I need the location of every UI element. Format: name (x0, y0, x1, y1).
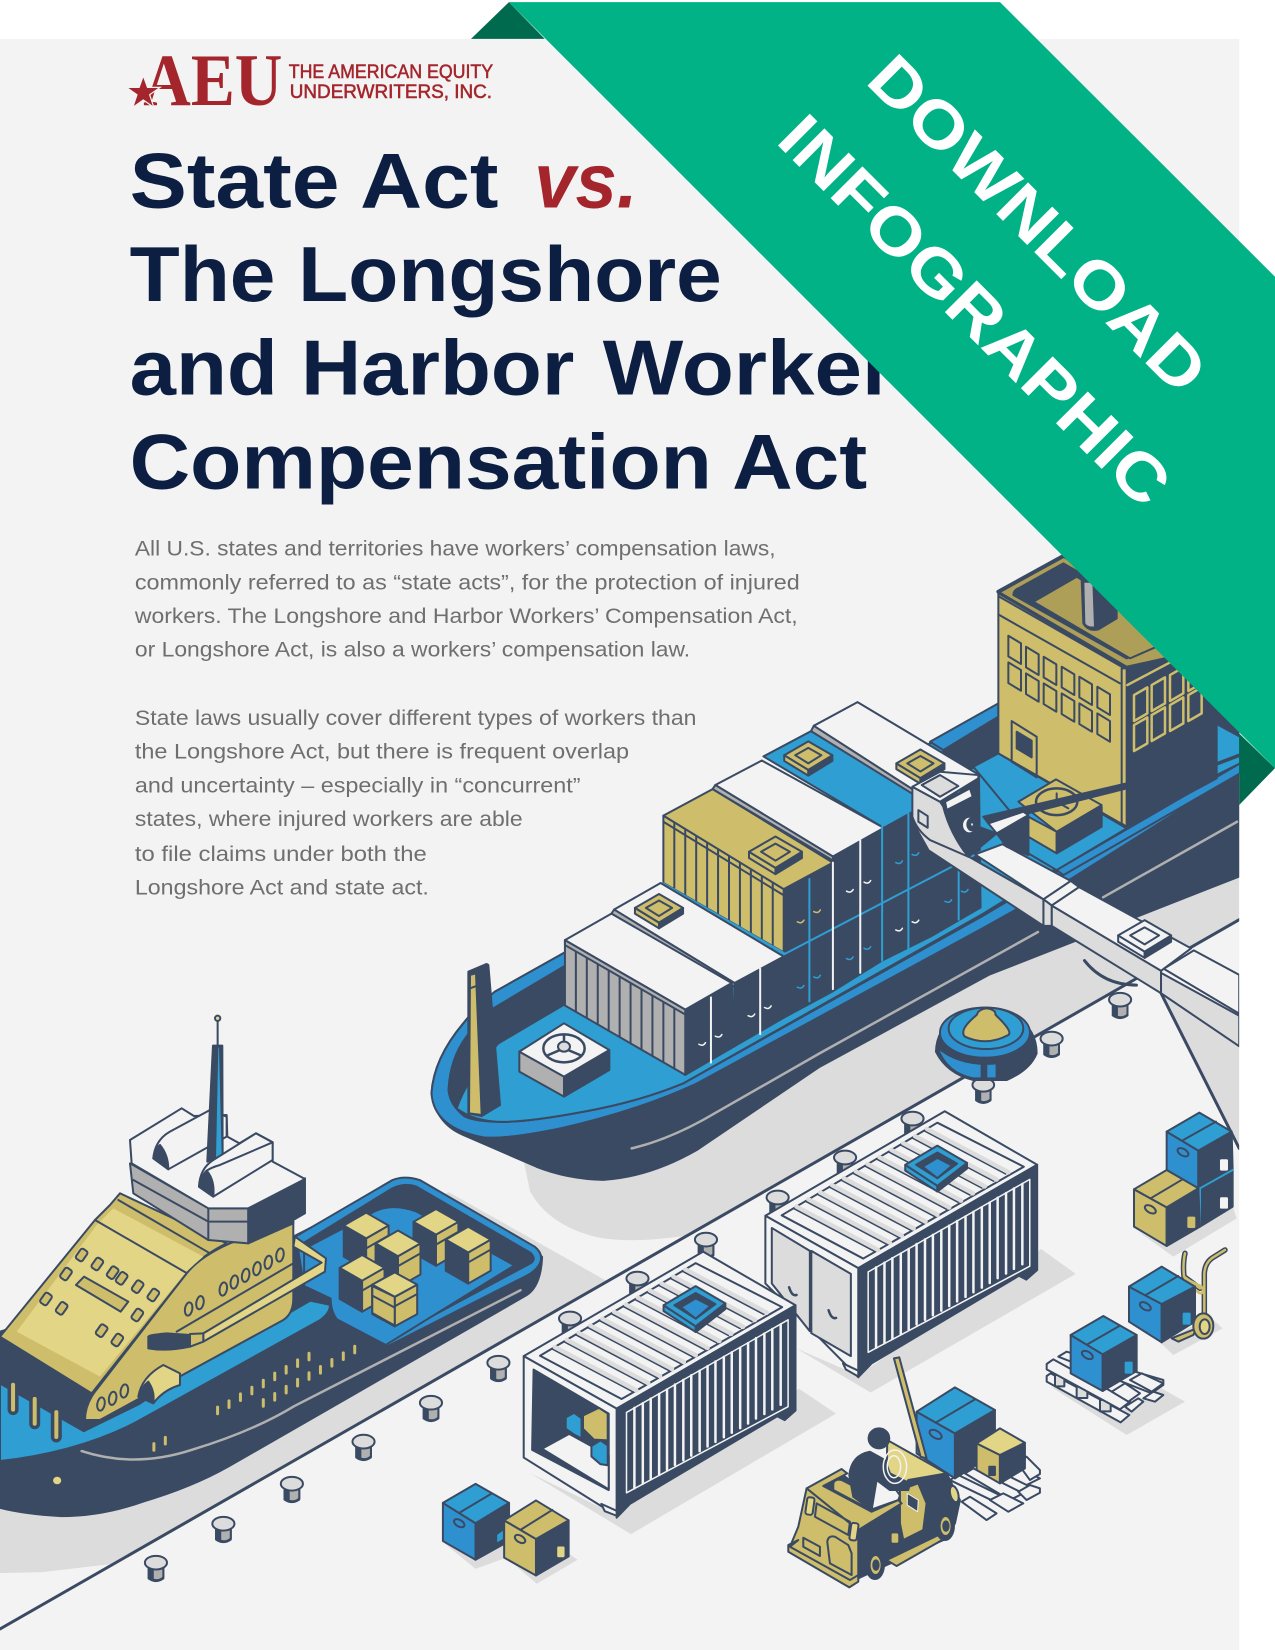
rear white and blue containers (763, 702, 981, 961)
aft deck details (930, 703, 998, 750)
intro paragraph (134, 536, 800, 662)
forklift body (788, 1440, 960, 1587)
winch box (1028, 817, 1057, 853)
right side cargo (1047, 1113, 1237, 1435)
building right face (1128, 659, 1218, 828)
blue box (443, 1484, 509, 1560)
container: open with cargo (524, 1252, 796, 1518)
superstructure front slope (0, 1193, 227, 1393)
title: vs. (534, 136, 638, 224)
ribbon text: infographic: INFOGRAPHIC (765, 100, 1185, 520)
forklift driver (849, 1428, 910, 1510)
box shadows (444, 1539, 578, 1584)
bollards along quay (145, 993, 1131, 1581)
title: State Act (130, 136, 498, 224)
crane underside (1084, 961, 1136, 985)
upper block (130, 1163, 305, 1243)
aft deck inner (304, 1185, 534, 1342)
third white container (713, 761, 884, 991)
intro paragraph: workers. The Longshore and Harbor Workers’ Compensation Act, (134, 603, 798, 628)
container end lines and handles (784, 785, 983, 1001)
cargo shadows (1051, 1207, 1237, 1435)
logo letters AEU: AEU (143, 39, 282, 121)
forklift with cargo (788, 1357, 1040, 1587)
container shadows (530, 1249, 1076, 1534)
title: Compensation Act (130, 417, 867, 505)
hull stripe (82, 1290, 520, 1459)
container stacks on large ship (565, 702, 983, 1075)
small ship superstructure (0, 1016, 326, 1420)
ribbon text: download: DOWNLOAD (854, 40, 1222, 407)
second paragraph: the Longshore Act, but there is frequent overlap (135, 739, 629, 764)
second paragraph: and uncertainty – especially in “concurrent” (135, 772, 581, 797)
front funnel (199, 1133, 273, 1197)
hull stripe (632, 822, 1237, 1148)
container: doors closed (765, 1111, 1037, 1377)
hull (430, 732, 1240, 1181)
deck posts (13, 1385, 56, 1437)
side windows (96, 1248, 285, 1411)
hand truck with blue box (1129, 1250, 1225, 1342)
shipping containers (524, 1111, 1076, 1534)
mast (207, 1016, 223, 1162)
intro paragraph: or Longshore Act, is also a workers’ compensation law. (135, 637, 690, 662)
forklift yellow box (977, 1428, 1025, 1483)
stacked boxes (1134, 1113, 1233, 1246)
logo: AEU (126, 39, 493, 121)
deck rim (431, 703, 1239, 1138)
bow winch (519, 1023, 609, 1097)
second paragraph: states, where injured workers are able (135, 806, 523, 831)
bow mast (468, 964, 500, 1116)
second paragraph (135, 705, 697, 899)
bow winch and mast (468, 964, 609, 1116)
title: The Longshore (130, 230, 722, 318)
second paragraph: to file claims under both the (135, 841, 427, 866)
small cargo ship (0, 1178, 542, 1516)
front windows (39, 1248, 160, 1347)
forklift mast (894, 1357, 927, 1458)
side bump (138, 1365, 180, 1403)
aft deck floor (304, 1207, 514, 1345)
logo company name: THE AMERICAN EQUITY (289, 62, 493, 83)
hull portholes (154, 1346, 355, 1450)
building front face (998, 593, 1127, 827)
water shadows (0, 878, 1240, 1630)
cargo boxes near quay (443, 1484, 578, 1584)
gantry crane (915, 826, 1239, 1148)
pallet with blue box (1047, 1316, 1163, 1422)
large ship hull (431, 663, 1239, 1180)
bridge building and aft deck (930, 556, 1240, 875)
harbor illustration (0, 556, 1240, 1629)
side windows (1134, 657, 1202, 751)
forklift pallet (950, 1457, 1040, 1520)
download ribbon (471, 2, 1275, 805)
fore deck (0, 1301, 330, 1461)
deck cargo cubes (340, 1209, 491, 1326)
title: and Harbor (130, 324, 574, 412)
logo: AEU: UNDERWRITERS, INC. (290, 82, 492, 103)
crane leg (1161, 993, 1239, 1148)
forklift blue box (917, 1387, 995, 1478)
hull (0, 1225, 544, 1518)
rear funnel (153, 1110, 227, 1169)
crane head (912, 772, 1127, 857)
second paragraph: State laws usually cover different types of workers than (135, 705, 697, 730)
beam sides (915, 826, 1043, 926)
aft deck rim (296, 1178, 541, 1346)
roof cap (130, 1108, 305, 1208)
ribbon band (509, 2, 1275, 768)
logo star (126, 76, 160, 107)
title: Workers’ (603, 324, 966, 412)
deck floor (458, 768, 1138, 1123)
second paragraph: Longshore Act and state act. (135, 874, 429, 899)
ribbon fold right (1239, 733, 1275, 805)
beam hatch (1118, 920, 1171, 958)
intro paragraph: commonly referred to as “state acts”, for the protection of injured (135, 569, 800, 594)
title (130, 136, 966, 505)
forklift wheels (866, 1485, 960, 1579)
mooring buoy (936, 1008, 1037, 1103)
front windows (1008, 636, 1110, 742)
building door (1012, 721, 1037, 777)
second front white container (611, 883, 784, 1046)
roof (1000, 558, 1164, 666)
balcony (148, 1237, 326, 1350)
beam tops (975, 844, 1071, 899)
yellow box (504, 1500, 569, 1575)
gray ribbed container (565, 914, 734, 1075)
superstructure side (85, 1222, 293, 1420)
ribbon fold left (471, 2, 545, 39)
intro paragraph: All U.S. states and territories have workers’ compensation laws, (135, 536, 776, 561)
yellow container (663, 789, 833, 1018)
deck inner wall (448, 712, 1239, 1122)
